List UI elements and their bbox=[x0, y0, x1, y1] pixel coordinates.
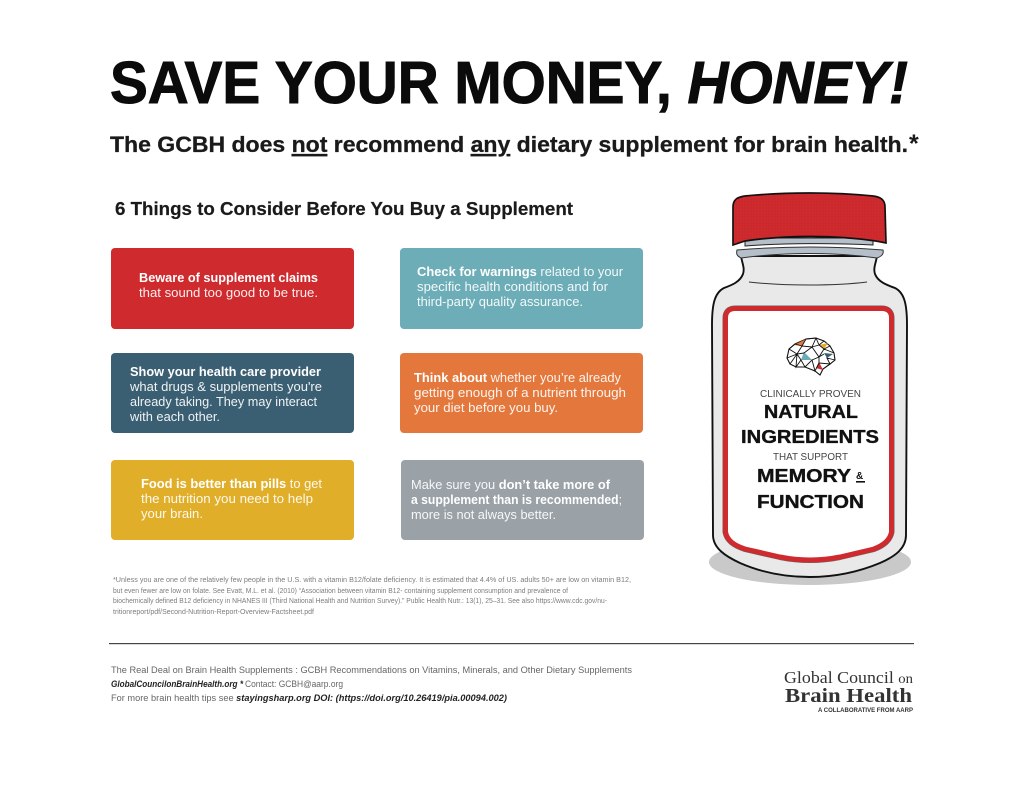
card: food: Food is better than pills to get bbox=[141, 476, 322, 491]
bottle body bbox=[712, 256, 907, 577]
card: dosage bbox=[401, 460, 644, 540]
title: SAVE YOUR MONEY, HONEY! bbox=[110, 50, 908, 116]
bottle label bbox=[726, 308, 892, 560]
card: dosage: a supplement than is recommended; bbox=[411, 492, 622, 507]
card: warnings bbox=[400, 248, 643, 329]
card: health care provider: Show your health care provider bbox=[130, 364, 321, 379]
card: supplement claims bbox=[111, 248, 354, 329]
card: dosage: more is not always better. bbox=[411, 507, 556, 522]
card: dosage: Make sure you don’t take more of bbox=[411, 477, 611, 492]
footnote: *Unless you are one of the relatively few people in the U.S. with a vitamin B12/folate deficiency. It is estimated that 4.4% of US. adults 50+ are low on vitamin B12, bbox=[113, 577, 631, 584]
footer text bbox=[111, 665, 632, 703]
logo: Global Council on Brain Health: Global Council on bbox=[784, 668, 913, 687]
card: warnings: Check for warnings related to your bbox=[417, 264, 624, 279]
card: warnings: third-party quality assurance. bbox=[417, 294, 583, 309]
card: health care provider: already taking. They may interact bbox=[130, 394, 317, 409]
label text: MEMORY bbox=[757, 466, 851, 486]
label text: NATURAL bbox=[764, 402, 858, 422]
card: think about: getting enough of a nutrient through bbox=[414, 385, 626, 400]
card: food: the nutrition you need to help bbox=[141, 491, 313, 506]
card: think about: Think about whether you’re already bbox=[414, 370, 621, 385]
card: health care provider: with each other. bbox=[129, 409, 220, 424]
footnote: but even fewer are low on folate. See Evatt, M.L. et al. (2010) “Association between vitamin B12- containing supplement consumption and prevalence of bbox=[113, 588, 568, 595]
bottle shadow bbox=[709, 539, 911, 585]
bottle cap bbox=[733, 193, 886, 245]
logo: Global Council on Brain Health bbox=[784, 668, 913, 714]
card: think about: your diet before you buy. bbox=[414, 400, 558, 415]
footnote: tritionreport/pdf/Second-Nutrition-Report-Overview-Factsheet.pdf bbox=[113, 609, 314, 616]
footer text: Contact: GCBH@aarp.org bbox=[245, 679, 343, 689]
card: food bbox=[111, 460, 354, 540]
footnote: biochemically defined B12 deficiency in NHANES III (Third National Health and Nutrition Survey).” Public Health Nutr.: 13(1), 25–31. See also https://www.cdc.gov/nu- bbox=[113, 598, 608, 605]
card: think about bbox=[400, 353, 643, 433]
brain icon bbox=[787, 338, 835, 375]
label text: CLINICALLY PROVEN bbox=[760, 389, 861, 400]
label text: FUNCTION bbox=[757, 492, 864, 512]
bottle neck rings bbox=[737, 238, 883, 258]
card: supplement claims: that sound too good to be true. bbox=[139, 285, 318, 300]
footer text: GlobalCouncilonBrainHealth.org * bbox=[111, 679, 243, 689]
card: health care provider: what drugs & supplements you're bbox=[129, 379, 322, 394]
card: food: your brain. bbox=[141, 506, 203, 521]
card: health care provider bbox=[111, 353, 354, 433]
card: warnings: specific health conditions and for bbox=[417, 279, 609, 294]
subtitle: * bbox=[909, 130, 919, 158]
card: supplement claims: Beware of supplement claims bbox=[139, 270, 318, 285]
label text: INGREDIENTS bbox=[741, 427, 879, 447]
subtitle: The GCBH does not recommend any dietary supplement for brain health. bbox=[110, 132, 908, 157]
footer text: For more brain health tips see stayingsharp.org DOI: (https://doi.org/10.26419/pia.00094.002) bbox=[111, 693, 507, 703]
footnote bbox=[113, 577, 631, 616]
logo: Global Council on Brain Health: A COLLABORATIVE FROM AARP bbox=[818, 708, 913, 714]
label text: THAT SUPPORT bbox=[773, 452, 848, 463]
label text: & bbox=[856, 471, 863, 482]
section heading: 6 Things to Consider Before You Buy a Supplement bbox=[115, 199, 573, 219]
footer text: The Real Deal on Brain Health Supplements : GCBH Recommendations on Vitamins, Minerals, and Other Dietary Supplements bbox=[111, 665, 632, 675]
logo: Global Council on Brain Health: Brain Health bbox=[785, 685, 912, 707]
illustration: supplement bottle bbox=[709, 193, 911, 585]
label text bbox=[741, 389, 879, 512]
